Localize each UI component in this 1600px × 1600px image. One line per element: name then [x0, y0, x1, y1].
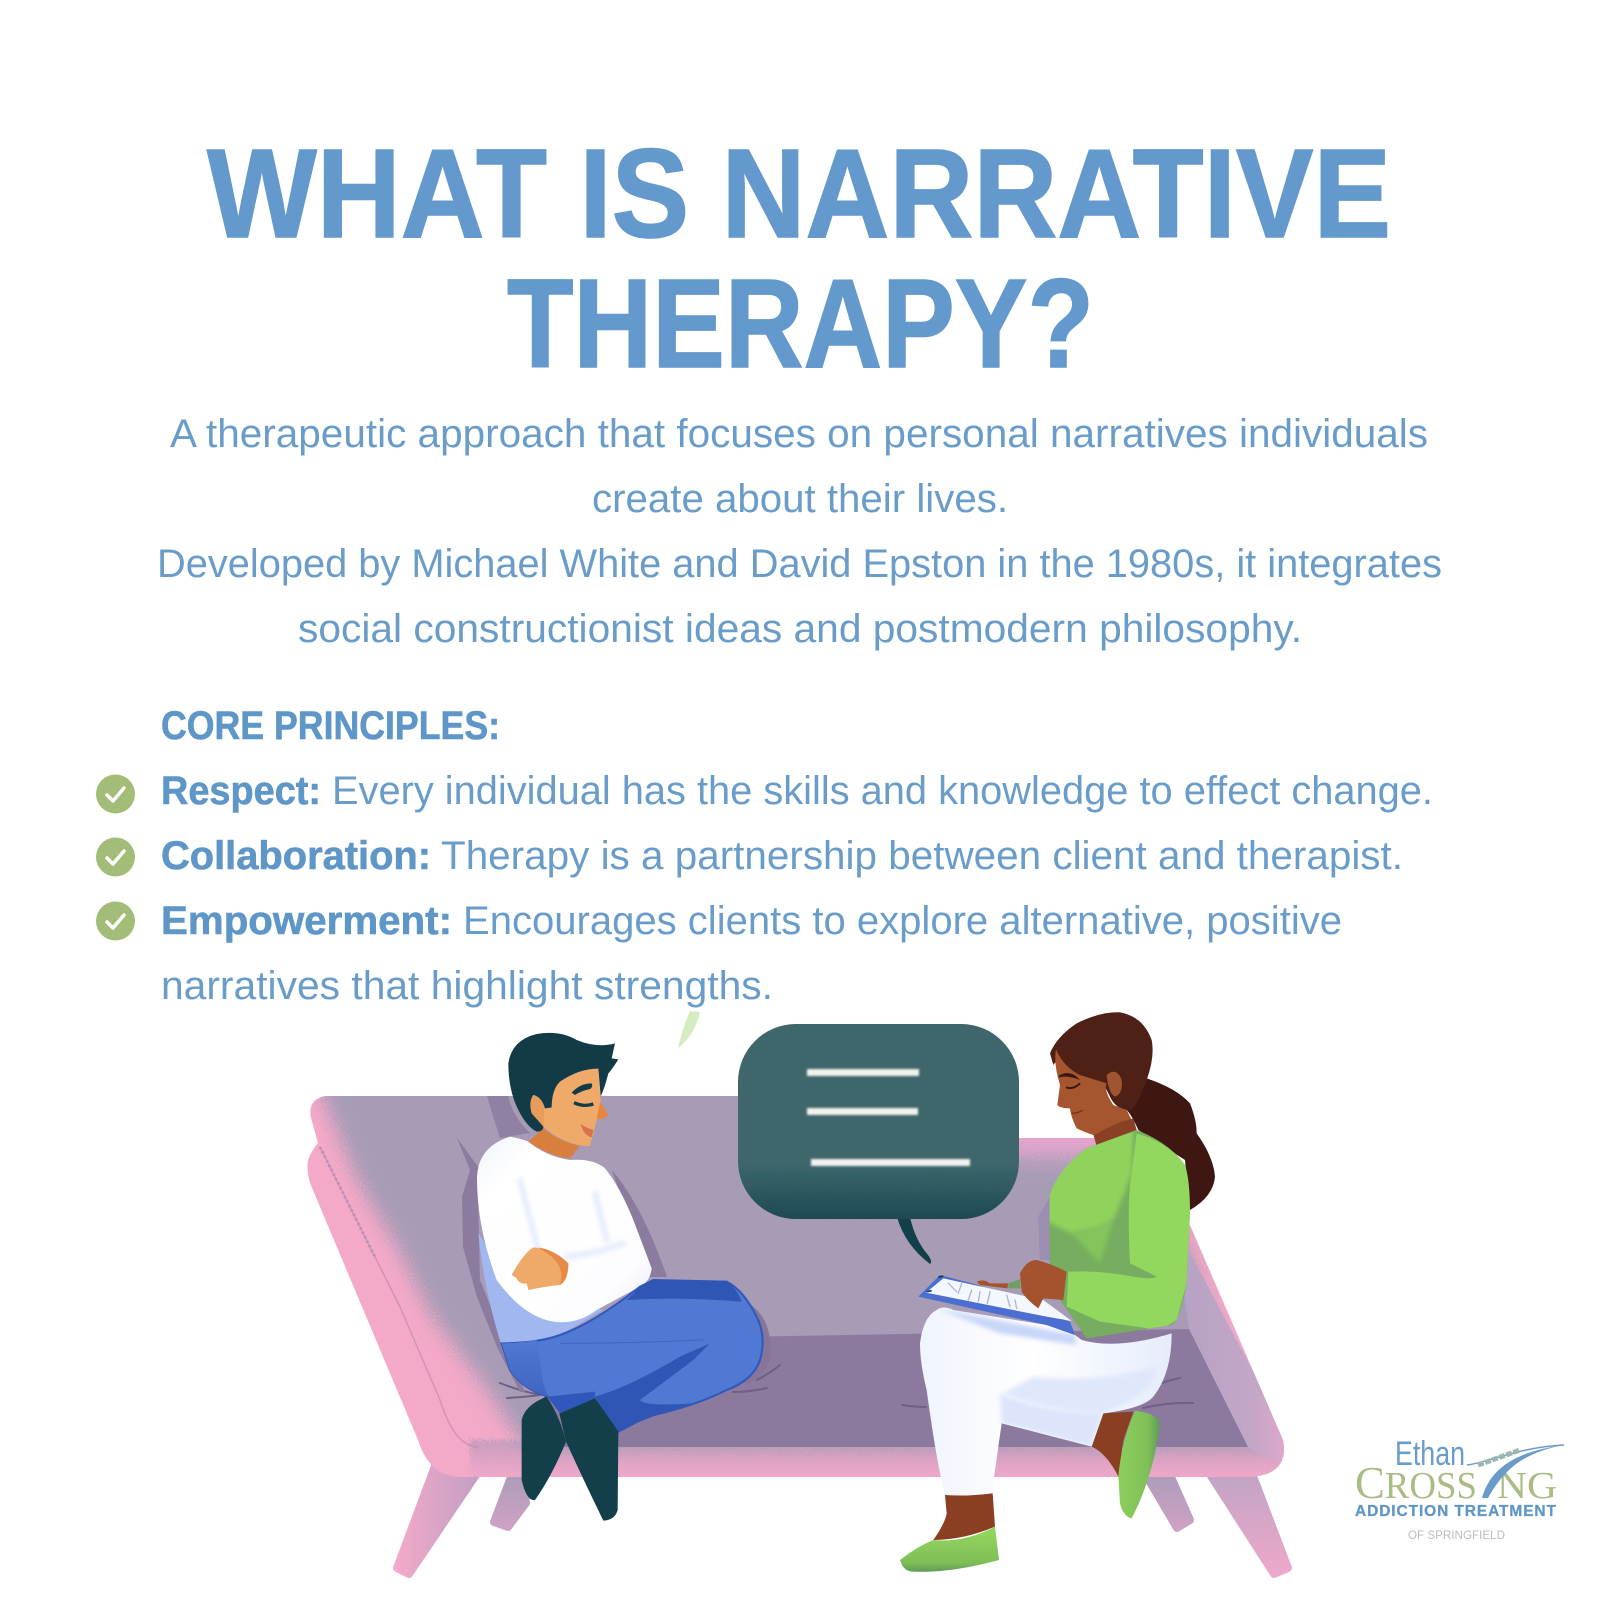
ponytail: [1127, 1078, 1215, 1210]
intro text block: [157, 412, 1442, 651]
icon: check empowerment: [96, 902, 135, 940]
man trousers and socks: [502, 1280, 763, 1521]
sweater: [1049, 1130, 1190, 1338]
intro text block: create about their lives.: [592, 477, 1008, 521]
bubble text lines: [807, 1069, 970, 1166]
principle: collaboration: Collaboration:: [161, 834, 431, 878]
principle: empowerment: [96, 899, 1342, 1008]
principle: respect: Every individual has the skills and knowledge to effect change.: [332, 769, 1433, 813]
shadows behind man: [457, 1138, 525, 1392]
icon: check collaboration: [96, 838, 135, 876]
woman upper body: [1038, 1012, 1215, 1343]
logo road swoosh: [1467, 1445, 1564, 1498]
principle: empowerment: Encourages clients to explore alternative, positive: [463, 899, 1342, 943]
logo: Ethan Crossing: Ethan: [1395, 1435, 1465, 1473]
logo: Ethan Crossing: OF SPRINGFIELD: [1408, 1528, 1505, 1542]
woman with clipboard: [900, 1012, 1215, 1572]
intro text block: Developed by Michael White and David Epston in the 1980s, it integrates: [157, 542, 1442, 586]
hair: [1050, 1012, 1153, 1110]
title: WHAT IS NARRATIVE: [207, 123, 1391, 264]
face: [1055, 1049, 1137, 1147]
face: [529, 1068, 601, 1146]
illustration: therapy session on sofa: [290, 1011, 1300, 1574]
hand: [977, 1280, 1008, 1288]
clipboard: [918, 1275, 1075, 1335]
principle: respect: Respect:: [161, 769, 321, 813]
hair: [508, 1033, 618, 1132]
speech bubble: [725, 1024, 1035, 1264]
principle: collaboration: Therapy is a partnership between client and therapist.: [441, 834, 1403, 878]
principle: empowerment: narratives that highlight strengths.: [161, 964, 773, 1008]
hand: [512, 1247, 568, 1290]
logo: Ethan Crossing: ADDICTION TREATMENT: [1355, 1503, 1557, 1520]
icon: check respect: [96, 774, 135, 814]
principle: empowerment: Empowerment:: [161, 899, 452, 943]
intro text block: social constructionist ideas and postmodern philosophy.: [298, 607, 1302, 651]
title: THERAPY?: [507, 253, 1094, 394]
man upper body: [477, 1033, 652, 1343]
woman lower body and clipboard: [900, 1260, 1172, 1572]
shoes: [900, 1527, 999, 1572]
logo: Ethan Crossing: NG: [1497, 1465, 1557, 1507]
seat creases: [500, 1365, 1193, 1408]
title: [207, 123, 1391, 394]
heading: core principles: CORE PRINCIPLES:: [161, 704, 500, 748]
man: [457, 1033, 771, 1521]
trousers: [920, 1307, 1172, 1496]
socks: [522, 1397, 566, 1500]
stray leaf stroke: [678, 1011, 700, 1048]
logo: Ethan Crossing: [1355, 1435, 1564, 1542]
lower legs: [933, 1493, 995, 1540]
sweater underside: [478, 1233, 603, 1343]
sofa: [290, 1060, 1300, 1574]
intro text block: A therapeutic approach that focuses on personal narratives individuals: [170, 412, 1428, 456]
logo: Ethan Crossing: CROSS: [1355, 1457, 1477, 1508]
